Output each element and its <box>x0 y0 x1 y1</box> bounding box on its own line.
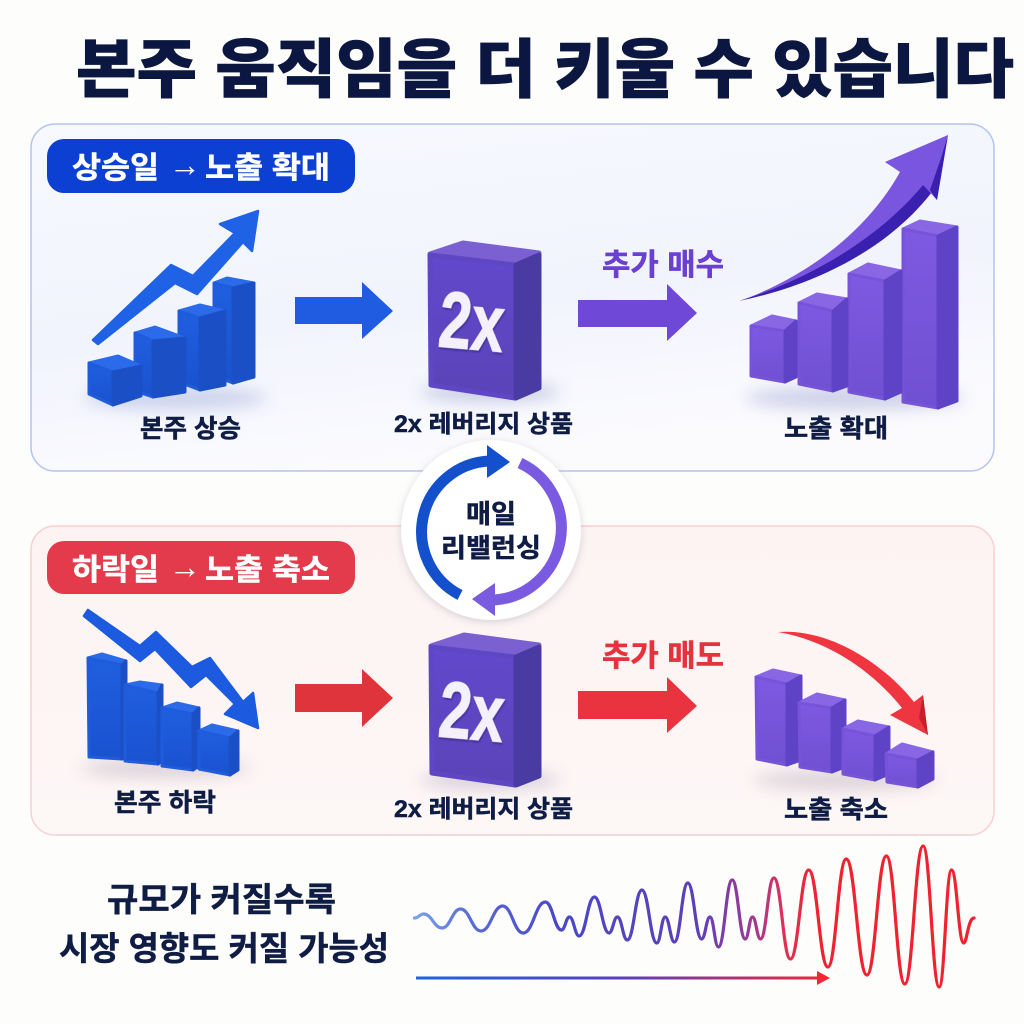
badge: falling day: 노출 축소 <box>205 554 330 587</box>
badge: falling day: → <box>169 548 201 585</box>
icon: purple cycle arrow <box>472 463 561 616</box>
title: 본주 움직임을 더 키울 수 있습니다 <box>76 34 1014 106</box>
label: daily rebalancing <box>441 499 541 563</box>
panel: rising day <box>31 124 994 471</box>
arrow: red additional sell <box>578 677 697 733</box>
label: 2x leverage product: 2x 레버리지 상품 <box>394 411 573 438</box>
label: exposure growing: 노출 확대 <box>784 415 888 443</box>
icon: 2x leverage box <box>420 635 560 789</box>
chart: exposure growing bars with curved arrow <box>739 135 965 410</box>
badge: falling day: 하락일 <box>72 554 159 587</box>
arrow: scale gradient arrow <box>416 971 830 985</box>
chart: underlying rising bars with zigzag arrow <box>83 211 267 410</box>
label: additional buy: 추가 매수 <box>602 249 724 282</box>
badge: rising day: → <box>169 146 201 183</box>
label: additional sell: 추가 매도 <box>602 640 724 673</box>
arrow: red to leverage product <box>295 669 393 727</box>
panel: falling day <box>31 526 994 835</box>
panel background: falling <box>31 526 994 835</box>
label: daily rebalancing: 매일 <box>466 499 516 529</box>
label: 2x leverage product: 2x 레버리지 상품 <box>394 796 573 823</box>
chart: underlying falling bars with zigzag arrow <box>80 610 258 778</box>
panel background: rising <box>31 124 994 471</box>
badge: rising day: 노출 확대 <box>205 152 330 185</box>
icon: 2x leverage box: 2x <box>436 664 508 759</box>
icon: blue cycle arrow <box>422 445 510 595</box>
icon: 2x leverage box <box>420 243 560 402</box>
note: market impact text: 규모가 커질수록 <box>107 881 336 918</box>
chart: exposure shrinking bars with curved arrow <box>753 632 937 790</box>
badge: falling day <box>47 541 355 594</box>
badge: rising day <box>47 139 355 193</box>
arrow: purple additional buy <box>578 284 697 341</box>
note: market impact text <box>59 881 389 967</box>
arrow: blue to leverage product <box>295 282 393 339</box>
icon: 2x leverage box: 2x <box>436 274 508 369</box>
daily rebalancing badge <box>401 440 581 620</box>
label: underlying falling: 본주 하락 <box>114 789 216 817</box>
note: market impact text: 시장 영향도 커질 가능성 <box>59 930 389 967</box>
badge: rising day: 상승일 <box>72 152 159 185</box>
label: underlying rising: 본주 상승 <box>140 415 241 443</box>
chart: growing oscillation wave <box>414 846 974 987</box>
label: daily rebalancing: 리밸런싱 <box>441 533 541 563</box>
label: exposure shrinking: 노출 축소 <box>784 796 888 824</box>
